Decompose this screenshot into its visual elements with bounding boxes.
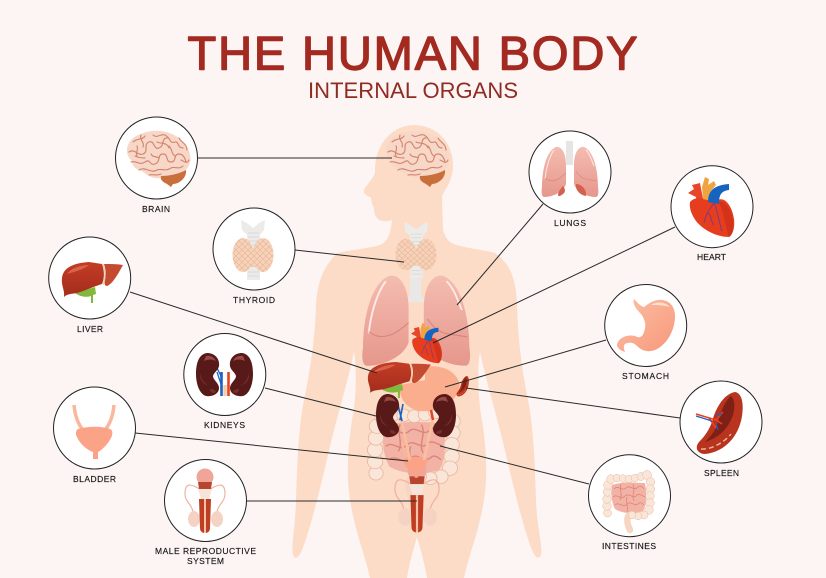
panel: heart <box>671 166 753 262</box>
label: brain: BRAIN <box>142 204 170 214</box>
subtitle: INTERNAL ORGANS <box>308 78 518 103</box>
connector: bladder <box>135 433 408 461</box>
title: THE HUMAN BODY <box>188 26 638 80</box>
label: spleen: SPLEEN <box>704 468 739 478</box>
panel: male reproductive system: SYSTEM <box>187 556 224 566</box>
connector: spleen <box>466 388 680 418</box>
panel: kidneys <box>184 334 266 430</box>
organ: brain <box>386 131 450 187</box>
panel: spleen <box>680 381 762 478</box>
organ: trachea <box>406 268 426 302</box>
connector: stomach <box>445 340 606 387</box>
panel: liver <box>49 237 131 334</box>
organ: right kidney <box>424 394 456 460</box>
organ: spleen <box>456 376 469 396</box>
organ: bladder <box>402 443 428 478</box>
label: heart: HEART <box>697 252 726 262</box>
panel: lungs <box>529 131 611 228</box>
connector: thyroid <box>295 250 404 262</box>
organ: stomach <box>400 366 459 411</box>
panel: thyroid <box>213 208 295 305</box>
panel: male reproductive system <box>155 460 256 566</box>
body silhouette with organs <box>292 125 541 578</box>
silhouette <box>292 125 541 578</box>
connector: intestines <box>440 446 589 484</box>
organ: liver <box>368 362 431 398</box>
panel: intestines <box>588 455 670 551</box>
connector: lungs <box>457 204 543 305</box>
label: bladder: BLADDER <box>73 474 116 484</box>
organ: intestines <box>367 402 460 502</box>
organ: left kidney <box>376 394 410 460</box>
label: male reproductive system: MALE REPRODUCTIVE <box>155 546 256 556</box>
connector: male reproductive system <box>246 500 417 502</box>
panel: brain <box>116 117 198 214</box>
label: stomach: STOMACH <box>622 371 669 381</box>
panel: bladder <box>54 387 136 484</box>
label: kidneys: KIDNEYS <box>204 420 245 430</box>
organ: lungs <box>362 276 470 366</box>
label: lungs: LUNGS <box>554 218 586 228</box>
connector: kidneys <box>265 388 380 417</box>
connector: liver <box>130 292 377 373</box>
connector: heart <box>433 227 675 343</box>
panel: stomach <box>605 284 687 381</box>
label: intestines: INTESTINES <box>602 541 656 551</box>
organ: thyroid <box>396 222 436 278</box>
organ: male reproductive system <box>395 462 439 532</box>
label: liver: LIVER <box>77 324 103 334</box>
label: thyroid: THYROID <box>233 295 275 305</box>
organ: heart <box>411 323 442 363</box>
connector: brain <box>198 157 392 159</box>
